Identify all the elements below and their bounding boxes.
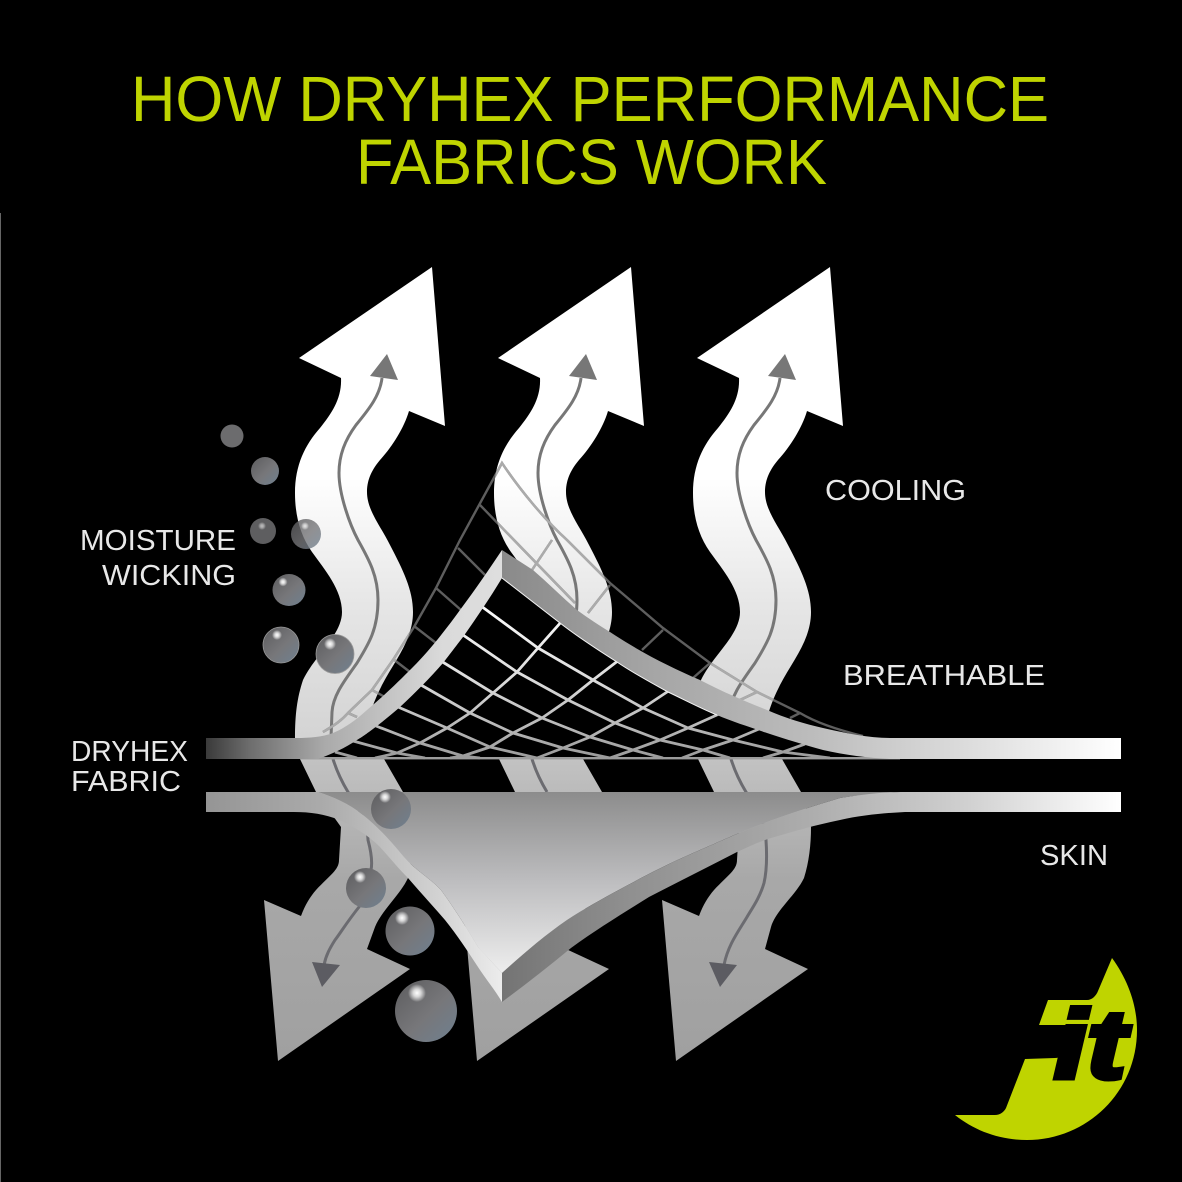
band right highlight edge xyxy=(502,578,717,715)
skin band right xyxy=(502,792,1121,1002)
top fabric mesh xyxy=(300,577,900,759)
label: skin: SKIN xyxy=(1040,840,1108,872)
back mesh on black xyxy=(323,463,863,736)
droplet xyxy=(386,906,434,956)
down arrow 2 xyxy=(463,759,612,1061)
mesh grid xyxy=(335,606,830,758)
droplet xyxy=(250,518,276,544)
label: moisture wicking xyxy=(80,525,236,592)
left edge line xyxy=(0,213,1,1182)
droplet xyxy=(251,457,279,485)
up arrow 3 xyxy=(693,267,843,738)
mesh bottom edge xyxy=(300,757,900,759)
droplet xyxy=(263,627,299,663)
back mesh over arrows xyxy=(322,460,774,733)
down arrow 1 xyxy=(264,759,413,1061)
label: dryhex fabric xyxy=(71,736,188,798)
label: cooling: COOLING xyxy=(825,475,966,507)
band left curve xyxy=(206,550,502,759)
skin band left xyxy=(206,792,502,1002)
arrows pointing down xyxy=(264,759,811,1061)
fabric top layer band xyxy=(206,550,1121,759)
logo crescent xyxy=(955,958,1137,1140)
skin layer xyxy=(206,792,1121,1002)
skin sheet xyxy=(318,792,900,973)
label: breathable: BREATHABLE xyxy=(843,660,1045,692)
up arrow 1 xyxy=(295,267,445,738)
droplet xyxy=(395,980,457,1042)
back mesh xyxy=(323,463,863,736)
droplet xyxy=(346,868,386,908)
labels xyxy=(71,475,1108,872)
droplet xyxy=(272,574,306,606)
title xyxy=(131,63,1049,198)
down arrow 3 xyxy=(662,759,811,1061)
logo xyxy=(955,958,1137,1140)
label: dryhex fabric: DRYHEX xyxy=(71,736,188,768)
droplet xyxy=(371,789,411,829)
label: moisture wicking: MOISTURE xyxy=(80,525,236,557)
label: dryhex fabric: FABRIC xyxy=(71,766,181,798)
title: HOW DRYHEX PERFORMANCE xyxy=(131,63,1049,135)
droplet xyxy=(291,519,321,549)
mesh backing xyxy=(318,577,890,759)
logo text: it xyxy=(1054,990,1130,1099)
title: FABRICS WORK xyxy=(356,126,827,198)
droplet xyxy=(316,634,354,674)
arrows pointing up xyxy=(295,267,843,738)
moisture droplets xyxy=(220,424,457,1042)
droplet xyxy=(220,424,244,448)
label: moisture wicking: WICKING xyxy=(102,560,236,592)
band right curve xyxy=(502,550,1121,759)
up arrow 2 xyxy=(494,267,644,738)
